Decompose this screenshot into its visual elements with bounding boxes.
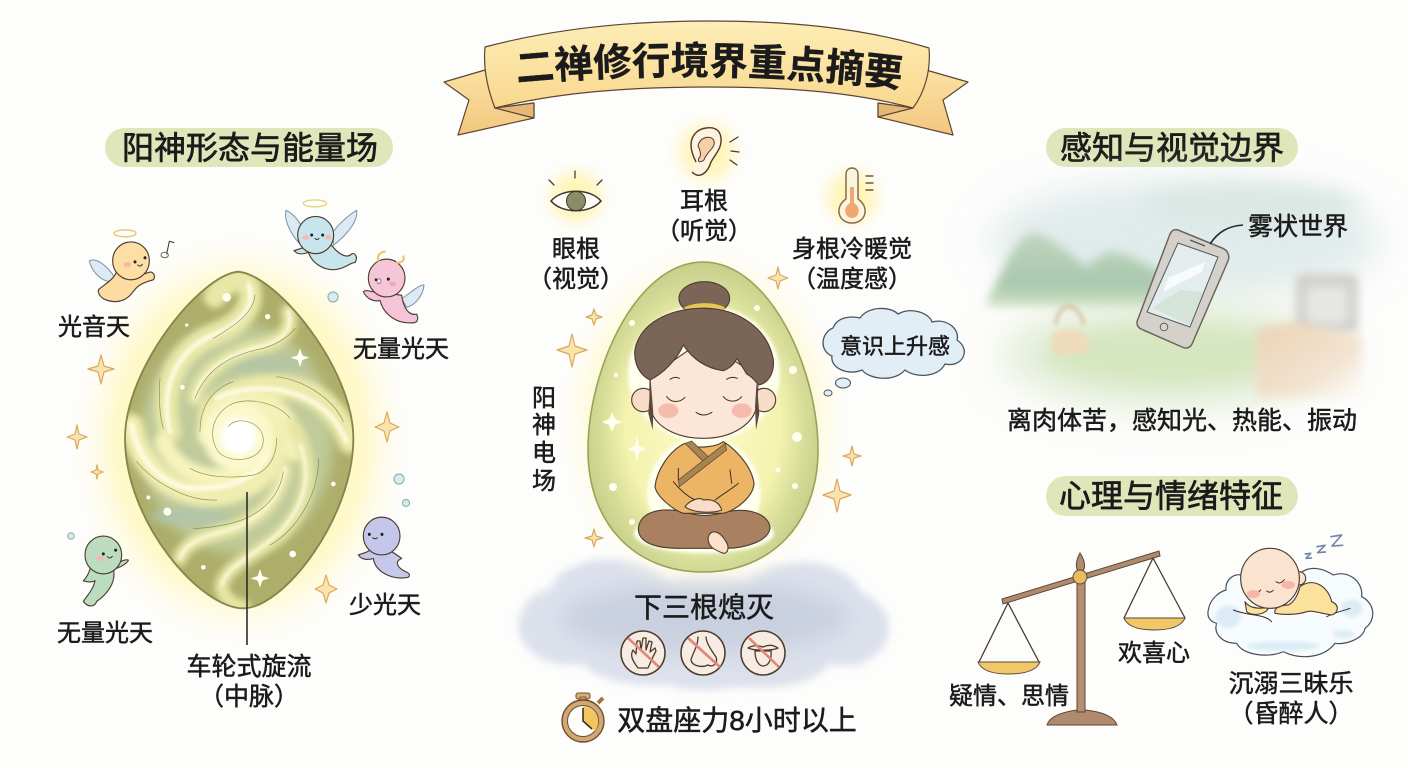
panel: senses and central figure — [518, 110, 964, 742]
misty landscape — [985, 182, 1380, 410]
label: wheel vortex — [186, 653, 312, 711]
icon: ear — [665, 110, 749, 194]
label: joy: 欢喜心 — [1118, 640, 1190, 667]
ears — [632, 388, 776, 412]
label: body root: 身根冷暖觉 — [792, 236, 912, 263]
label: yang spirit electric field — [532, 385, 556, 495]
icon: no smell — [681, 631, 725, 675]
label: ear root — [656, 188, 752, 245]
label: body root: （温度感） — [792, 266, 912, 293]
icon: bubble — [328, 292, 338, 302]
label: yang spirit electric field: 电 — [532, 440, 556, 467]
thought cloud: rising awareness: 意识上升感 — [840, 334, 950, 359]
legs — [638, 510, 770, 548]
icons: sparkles — [557, 267, 861, 547]
label: ear root: 耳根 — [680, 188, 728, 215]
label: abhasvara heaven: 光音天 — [58, 314, 130, 341]
icon: no taste — [741, 631, 785, 675]
label: body root — [792, 236, 912, 293]
label: yang spirit electric field: 神 — [532, 412, 556, 439]
label: wheel vortex: （中脉） — [199, 683, 299, 711]
foot — [708, 532, 728, 553]
icon: green spirit — [83, 536, 128, 606]
heading pill: 阳神形态与能量场 — [122, 130, 378, 166]
label: samadhi bliss: 沉溺三昧乐 — [1228, 670, 1354, 698]
hair bun — [679, 282, 730, 315]
icon: eye — [538, 159, 614, 235]
icons: bubbles and sparkles — [67, 355, 410, 603]
icon: baby sleeping on cloud — [1208, 535, 1373, 657]
title text: 二禅修行境界重点摘要 — [518, 41, 902, 90]
label: samadhi bliss: （昏醉人） — [1228, 700, 1354, 728]
panel: psychology and emotion — [949, 476, 1373, 728]
character: meditating child — [628, 282, 780, 553]
label: doubt and thought: 疑情、思情 — [949, 683, 1069, 710]
icon: thermometer — [814, 159, 890, 235]
label: lesser light heaven: 少光天 — [349, 592, 421, 619]
label: yang spirit electric field: 场 — [532, 468, 556, 495]
label: wheel vortex: 车轮式旋流 — [186, 653, 312, 681]
energy egg with glow — [553, 238, 853, 602]
label: eye root: 眼根 — [552, 236, 600, 263]
icon: pink spirit — [363, 252, 424, 323]
head and face — [635, 308, 773, 438]
label: boundless light heaven left: 无量光天 — [57, 620, 153, 647]
leader line: wheel vortex — [246, 492, 248, 645]
icon: phone — [1137, 230, 1229, 348]
icon: stopwatch — [562, 693, 604, 742]
callout line — [1210, 225, 1243, 244]
icon: no touch — [621, 631, 665, 675]
icon: purple spirit — [358, 517, 409, 578]
title banner — [443, 20, 969, 136]
label: eye root — [528, 236, 624, 293]
panel: perception and visual boundary — [985, 128, 1380, 435]
icon: yellow spirit — [89, 230, 174, 302]
text block: perception summary: 离肉体苦，感知光、热能、振动 — [1007, 407, 1357, 435]
label: double lotus over eight hours: 双盘座力8小时以上 — [617, 705, 857, 736]
panel: yang spirit form and energy field — [57, 128, 449, 711]
thought cloud: rising awareness — [823, 308, 964, 396]
label: eye root: （视觉） — [528, 266, 624, 293]
grey cloud: lower three roots extinguished — [518, 559, 889, 690]
label: lower three roots: 下三根熄灭 — [634, 592, 774, 623]
swirl egg with glow — [84, 248, 396, 632]
label: ear root: （听觉） — [656, 218, 752, 245]
icon: blue spirit — [286, 200, 357, 270]
robe — [655, 441, 754, 513]
icon: balance scale — [978, 551, 1185, 725]
label: yang spirit electric field: 阳 — [532, 385, 556, 412]
heading pill: 感知与视觉边界 — [1060, 130, 1284, 166]
label: fog world: 雾状世界 — [1248, 213, 1348, 241]
heading pill: 心理与情绪特征 — [1059, 478, 1283, 514]
label: boundless light heaven right: 无量光天 — [353, 336, 449, 363]
label: samadhi bliss — [1228, 670, 1354, 728]
white halo — [628, 305, 780, 553]
